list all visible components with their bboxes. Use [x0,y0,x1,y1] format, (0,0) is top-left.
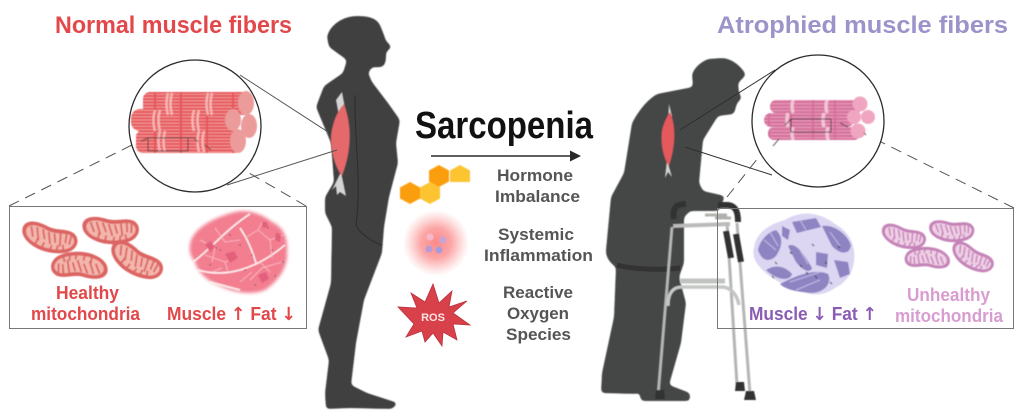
label: healthy mitochondria: Healthy [56,283,119,303]
icon: hormone hexagons [400,165,470,204]
walker frame [655,204,756,400]
icon: ROS burst [398,284,470,346]
label: systemic inflammation [484,225,593,265]
panel: normal box [10,206,306,328]
label: muscle up fat down: Muscle ↑ Fat ↓ [167,304,296,325]
label: hormone imbalance: Imbalance [495,187,580,206]
callout connectors: right [680,70,1014,208]
unhealthy mitochondria [880,218,998,277]
panel: normal muscle zoom circle [129,60,261,192]
title: atrophied muscle fibers: Atrophied muscle fibers [717,12,1008,39]
label: unhealthy mitochondria: Unhealthy [907,285,990,305]
standing man silhouette [316,16,400,409]
label: reactive oxygen species: Reactive [503,283,573,302]
label: systemic inflammation: Inflammation [484,246,593,265]
label: healthy mitochondria: mitochondria [31,304,141,324]
stooped man silhouette [601,58,746,401]
atrophied muscle fiber bundle [764,96,875,146]
panel: atrophied box [718,208,1014,328]
arrow: progression [431,150,581,162]
icon: ROS burst: ROS [421,312,445,324]
muscle on stooped man [661,104,674,178]
normal muscle fiber bundle [131,91,257,153]
panel: atrophied muscle zoom circle [752,55,884,187]
heading: sarcopenia: Sarcopenia [415,105,594,147]
title: normal muscle fibers: Normal muscle fibers [55,12,292,39]
label: hormone imbalance: Hormone [497,166,573,185]
label: reactive oxygen species [503,283,573,344]
normal muscle tissue [190,211,287,293]
label: reactive oxygen species: Species [506,325,571,344]
icon: systemic inflammation [403,210,469,276]
atrophied muscle tissue [753,214,854,294]
label: healthy mitochondria [31,283,141,324]
label: reactive oxygen species: Oxygen [507,304,569,323]
label: muscle down fat up: Muscle ↓ Fat ↑ [749,304,877,325]
muscle on standing man [331,92,350,196]
label: unhealthy mitochondria: mitochondria [895,306,1004,326]
callout connectors: left [9,75,337,206]
label: hormone imbalance [495,166,580,206]
label: unhealthy mitochondria [895,285,1004,326]
healthy mitochondria [20,215,168,285]
label: systemic inflammation: Systemic [498,225,574,244]
